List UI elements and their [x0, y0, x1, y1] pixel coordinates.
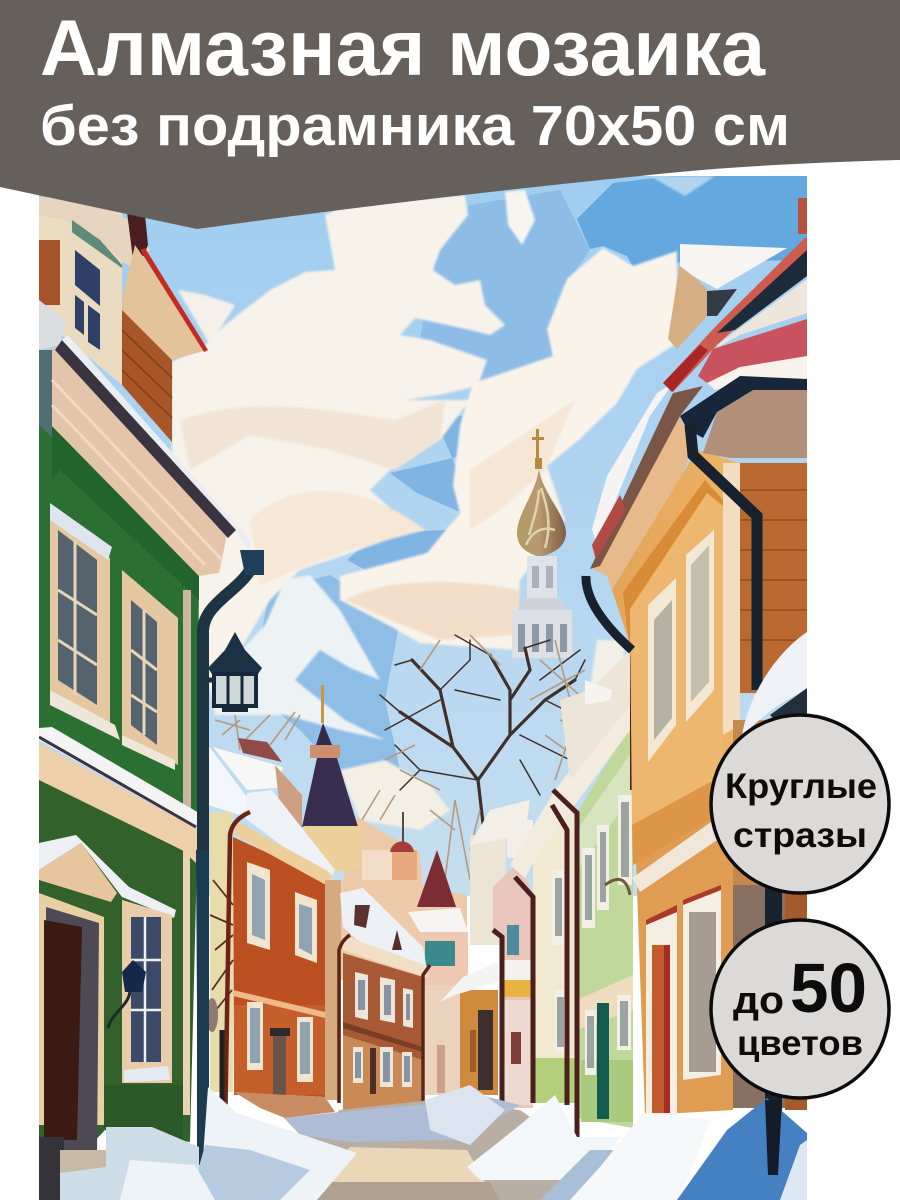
snow on side roof [742, 632, 807, 735]
badge: round rhinestones [711, 715, 889, 893]
badge: up to 50 colours: цветов [737, 1024, 863, 1063]
title: Алмазная мозаика [40, 3, 766, 92]
deep blue sky patches [250, 176, 807, 780]
bell tower [512, 429, 572, 658]
left building upper storey [39, 197, 208, 442]
sky-coloured gap corner [39, 210, 122, 318]
lower window [122, 900, 172, 1083]
eave and red edge [122, 245, 207, 360]
sky [39, 176, 807, 896]
drainpipe and street lantern [196, 550, 264, 1165]
window right [122, 570, 178, 765]
door [39, 893, 104, 1125]
drainpipes [690, 425, 757, 690]
brown-brick house [339, 888, 498, 1112]
badge: up to 50 colours [711, 920, 889, 1098]
badge: round rhinestones: Круглые [725, 767, 877, 806]
badge: up to 50 colours: 50 [790, 949, 867, 1027]
left lower storey [39, 775, 197, 1200]
right upper windows [648, 530, 714, 762]
pediment [39, 843, 117, 902]
subtitle: без подрамника 70х50 см [40, 94, 790, 158]
painting: winter street [39, 176, 807, 1200]
snowy street [60, 1085, 807, 1200]
right orange house [586, 198, 807, 1170]
header banner [0, 0, 900, 229]
gable [668, 263, 707, 349]
snow and brown eave [592, 387, 669, 540]
clouds [172, 176, 715, 830]
badge: round rhinestones: стразы [733, 816, 867, 855]
wall lantern [108, 960, 146, 1028]
red trim [663, 236, 807, 392]
cream cornice band [39, 727, 199, 863]
right small houses [493, 640, 640, 1137]
right lower windows [646, 885, 721, 1115]
badge: up to 50 colours: до [733, 980, 784, 1022]
bare tree [380, 635, 585, 832]
centre far buildings [302, 685, 533, 990]
cornice [52, 345, 228, 576]
left green upper storey [39, 335, 250, 815]
window left [50, 515, 110, 725]
steps [39, 1137, 64, 1200]
brick-red house [206, 738, 341, 1137]
upper window [62, 225, 122, 385]
